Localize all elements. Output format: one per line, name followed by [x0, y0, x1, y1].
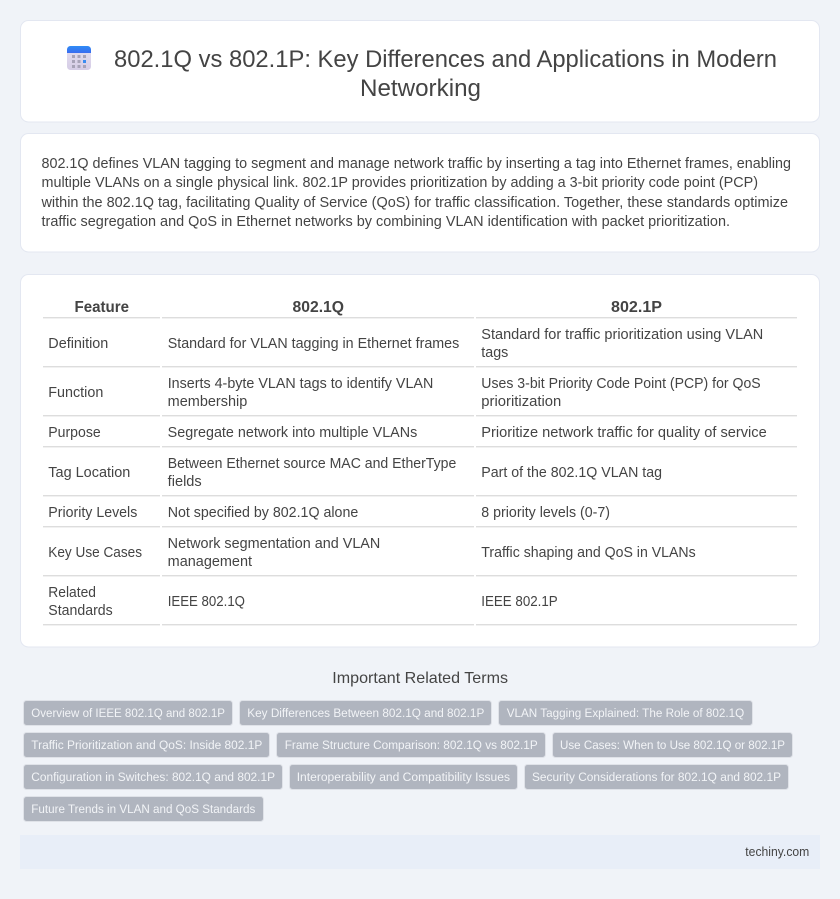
panel: related term tags: Use Cases: When to Use 802.1Q or 802.1P [560, 738, 785, 752]
row: definition: tags [481, 345, 508, 361]
row: priority levels: Not specified by 802.1Q alone [168, 505, 358, 521]
table header: 802.1P [611, 299, 662, 316]
heading: important related terms: Important Related Terms [332, 670, 508, 687]
panel: related term tags: Overview of IEEE 802.1Q and 802.1P [31, 706, 225, 720]
panel: description [20, 134, 820, 252]
title [114, 46, 777, 102]
row: related standards: IEEE 802.1Q [168, 594, 245, 610]
row: purpose: Prioritize network traffic for quality of service [481, 425, 767, 441]
row: function: prioritization [481, 394, 561, 410]
row: related standards: Related [48, 585, 96, 601]
row: priority levels [48, 505, 610, 521]
panel: related term tags: Traffic Prioritization and QoS: Inside 802.1P [31, 738, 262, 752]
panel: related term tags: Key Differences Between 802.1Q and 802.1P [247, 706, 484, 720]
icon: calendar [67, 46, 91, 70]
row: tag location: fields [168, 474, 202, 490]
panel: related term tags: Security Considerations for 802.1Q and 802.1P [532, 770, 781, 784]
row: function [48, 376, 761, 410]
row: purpose: Segregate network into multiple VLANs [168, 425, 417, 441]
row: tag location: Part of the 802.1Q VLAN tag [481, 465, 662, 481]
row: key use cases: management [168, 554, 252, 570]
row: tag location [48, 456, 662, 490]
text block: summary: within the 802.1Q tag, facilitating Quality of Service (QoS) for traffic classification. Together, these standards optimize [41, 195, 788, 211]
text block: summary: multiple VLANs on a single physical link. 802.1P provides prioritization by adding a 3-bit priority code point (PCP) [42, 175, 758, 191]
row: key use cases: Key Use Cases [48, 545, 142, 561]
row: related standards [48, 585, 558, 619]
title: Networking [360, 75, 481, 102]
panel: comparison table [20, 274, 820, 647]
row: function: Function [48, 385, 103, 401]
row: related standards: Standards [48, 603, 113, 619]
footer: techiny.com [745, 845, 809, 859]
row: related standards: IEEE 802.1P [481, 594, 558, 610]
row: purpose: Purpose [48, 425, 101, 441]
row: definition: Definition [48, 336, 108, 352]
table header: 802.1Q [292, 299, 344, 316]
panel: related term tags: Interoperability and Compatibility Issues [297, 770, 510, 784]
panel: related term tags: Frame Structure Comparison: 802.1Q vs 802.1P [285, 738, 538, 752]
row: tag location: Tag Location [48, 465, 130, 481]
row: key use cases: Traffic shaping and QoS in VLANs [481, 545, 696, 561]
text block: summary [41, 156, 791, 230]
panel: related term tags: VLAN Tagging Explained: The Role of 802.1Q [507, 706, 744, 720]
table header: Feature [74, 299, 129, 316]
row: priority levels: Priority Levels [48, 505, 137, 521]
row: definition: Standard for VLAN tagging in Ethernet frames [168, 336, 459, 352]
panel: related term tags: Future Trends in VLAN and QoS Standards [31, 802, 255, 816]
panel: related term tags: Configuration in Switches: 802.1Q and 802.1P [31, 770, 275, 784]
table header [74, 299, 662, 316]
text block: summary: traffic segregation and QoS in Ethernet networks by combining VLAN identification with packet prioritization. [42, 214, 730, 230]
text block: summary: 802.1Q defines VLAN tagging to segment and manage network traffic by inserting a tag into Ethernet frames, enabling [42, 156, 791, 172]
row: purpose [48, 425, 767, 441]
panel: related term tags [24, 700, 792, 822]
row: tag location: Between Ethernet source MAC and EtherType [168, 456, 456, 472]
row: definition: Standard for traffic prioritization using VLAN [481, 327, 763, 343]
row: definition [48, 327, 763, 361]
row: function: membership [168, 394, 247, 410]
footer [20, 835, 820, 869]
panel: title card [20, 20, 820, 122]
row: priority levels: 8 priority levels (0-7) [481, 505, 610, 521]
title: 802.1Q vs 802.1P: Key Differences and Applications in Modern [114, 46, 777, 73]
row: key use cases [48, 536, 696, 570]
row: key use cases: Network segmentation and VLAN [168, 536, 380, 552]
row: function: Inserts 4-byte VLAN tags to identify VLAN [168, 376, 433, 392]
row: function: Uses 3-bit Priority Code Point (PCP) for QoS [481, 376, 761, 392]
